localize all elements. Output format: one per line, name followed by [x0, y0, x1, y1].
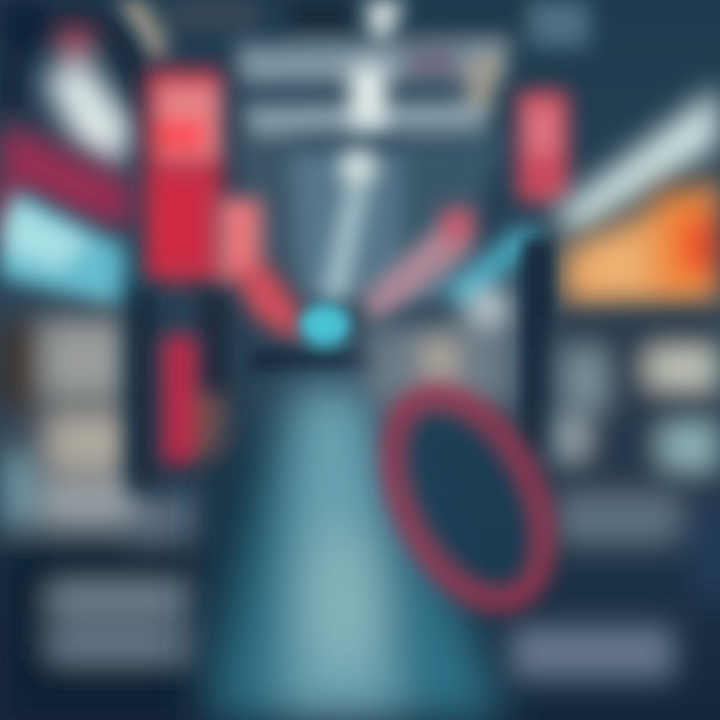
centre-right shelf: [365, 289, 515, 410]
left shelves: [0, 310, 205, 720]
pink and cyan diagonal strips right of centre: [360, 205, 545, 325]
top-left dark ring: [0, 0, 134, 125]
red hanging banner: [145, 68, 223, 283]
dark pillar right: [524, 240, 552, 450]
dark pillar left: [128, 290, 230, 490]
lower red banner: [162, 335, 228, 465]
aisle floor: [190, 385, 505, 720]
top-left white panel: [42, 27, 135, 170]
orange sign: [560, 175, 720, 310]
central light column: [322, 0, 405, 300]
right shelves: [510, 315, 720, 680]
crimson ring: [358, 368, 578, 628]
centre cyan vanishing point: [250, 304, 380, 372]
pink diagonal banner: [218, 198, 302, 345]
diagonal white beam: [550, 85, 720, 235]
ceiling structure: [115, 0, 590, 300]
left cyan awning: [0, 190, 144, 312]
left crimson diagonal band: [0, 125, 135, 240]
red hanging banner right: [517, 90, 569, 202]
